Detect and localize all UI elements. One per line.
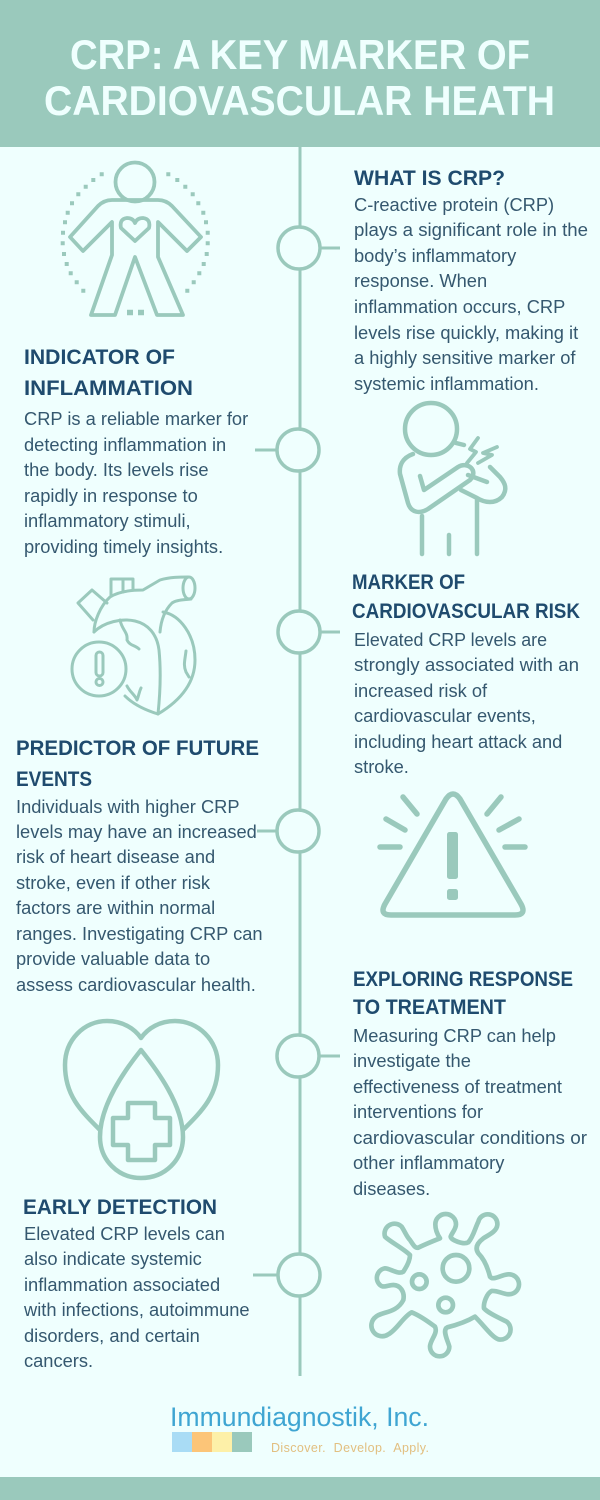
section: what is CRP: response. When: [354, 270, 487, 291]
footer band: [0, 1477, 600, 1500]
section: what is CRP: inflammation occurs, CRP: [354, 296, 565, 317]
section: exploring response to treatment: interventions for: [353, 1101, 483, 1122]
section: exploring response to treatment: other inflammatory: [353, 1152, 505, 1173]
section: exploring response to treatment: cardiovascular conditions or: [353, 1127, 587, 1148]
title: CRP: A KEY MARKER OF: [70, 31, 530, 78]
section: indicator of inflammation: INDICATOR OF: [24, 345, 175, 369]
section: indicator of inflammation: the body. Its levels rise: [24, 459, 209, 480]
icon: heart with alert: [72, 577, 195, 714]
section: exploring response to treatment: investigate the: [353, 1050, 471, 1071]
section: indicator of inflammation: providing timely insights.: [24, 536, 223, 557]
section: predictor of future events: assess cardiovascular health.: [16, 974, 256, 995]
icon: warning triangle: [380, 794, 525, 915]
section: predictor of future events: [16, 736, 263, 995]
section: early detection: cancers.: [24, 1350, 93, 1371]
section: exploring response to treatment: [353, 967, 587, 1199]
section: early detection: Elevated CRP levels can: [24, 1223, 225, 1244]
section: what is CRP: levels rise quickly, making it: [354, 322, 578, 343]
logo: [170, 1402, 429, 1455]
section: exploring response to treatment: Measuring CRP can help: [353, 1025, 556, 1046]
section: exploring response to treatment: effectiveness of treatment: [353, 1076, 562, 1097]
timeline: [253, 147, 340, 1376]
section: predictor of future events: factors are within normal: [16, 897, 215, 918]
section: what is CRP: WHAT IS CRP?: [354, 166, 505, 190]
icon: virus: [371, 1214, 519, 1356]
section: early detection: disorders, and certain: [24, 1325, 200, 1346]
title: [44, 31, 555, 124]
section: what is CRP: body’s inflammatory: [354, 245, 517, 266]
logo: Discover. Develop. Apply.: [271, 1441, 429, 1455]
section: marker of cardiovascular risk: increased risk of: [354, 680, 488, 701]
section: predictor of future events: EVENTS: [16, 767, 92, 791]
section: early detection: [23, 1195, 250, 1371]
section: early detection: also indicate systemic: [24, 1248, 202, 1269]
logo: Immundiagnostik, Inc.: [170, 1402, 429, 1432]
section: early detection: inflammation associated: [24, 1274, 220, 1295]
section: predictor of future events: provide valuable data to: [16, 948, 210, 969]
icon: body with heart: [63, 162, 208, 315]
section: early detection: EARLY DETECTION: [23, 1195, 217, 1219]
section: predictor of future events: ranges. Investigating CRP can: [16, 923, 263, 944]
section: indicator of inflammation: rapidly in response to: [24, 485, 198, 506]
section: marker of cardiovascular risk: [352, 570, 580, 777]
title: CARDIOVASCULAR HEATH: [44, 77, 555, 124]
section: predictor of future events: stroke, even if other risk: [16, 872, 211, 893]
section: indicator of inflammation: [24, 345, 248, 557]
section: indicator of inflammation: detecting inflammation in: [24, 434, 226, 455]
section: what is CRP: plays a significant role in the: [354, 219, 588, 240]
section: exploring response to treatment: EXPLORING RESPONSE: [353, 967, 573, 991]
icon: heart and blood drop with cross: [65, 1021, 218, 1178]
section: indicator of inflammation: INFLAMMATION: [24, 376, 193, 400]
section: marker of cardiovascular risk: cardiovascular events,: [354, 705, 536, 726]
section: marker of cardiovascular risk: strongly associated with an: [354, 654, 579, 675]
section: indicator of inflammation: inflammatory stimuli,: [24, 510, 191, 531]
section: predictor of future events: levels may have an increased: [16, 821, 257, 842]
section: indicator of inflammation: CRP is a reliable marker for: [24, 408, 248, 429]
section: what is CRP: C-reactive protein (CRP): [354, 194, 554, 215]
section: what is CRP: [354, 166, 588, 394]
section: marker of cardiovascular risk: stroke.: [354, 756, 409, 777]
section: predictor of future events: risk of heart disease and: [16, 846, 215, 867]
section: exploring response to treatment: TO TREATMENT: [353, 995, 506, 1019]
section: marker of cardiovascular risk: Elevated CRP levels are: [354, 629, 547, 650]
section: predictor of future events: Individuals with higher CRP: [16, 796, 240, 817]
section: predictor of future events: PREDICTOR OF FUTURE: [16, 736, 259, 760]
section: what is CRP: systemic inflammation.: [354, 373, 539, 394]
header banner: [0, 0, 600, 147]
section: what is CRP: a highly sensitive marker of: [354, 347, 576, 368]
section: exploring response to treatment: diseases.: [353, 1178, 430, 1199]
section: marker of cardiovascular risk: including heart attack and: [354, 731, 562, 752]
icon: person with shoulder pain: [400, 403, 505, 554]
section: early detection: with infections, autoimmune: [23, 1299, 250, 1320]
section: marker of cardiovascular risk: MARKER OF: [352, 570, 465, 594]
